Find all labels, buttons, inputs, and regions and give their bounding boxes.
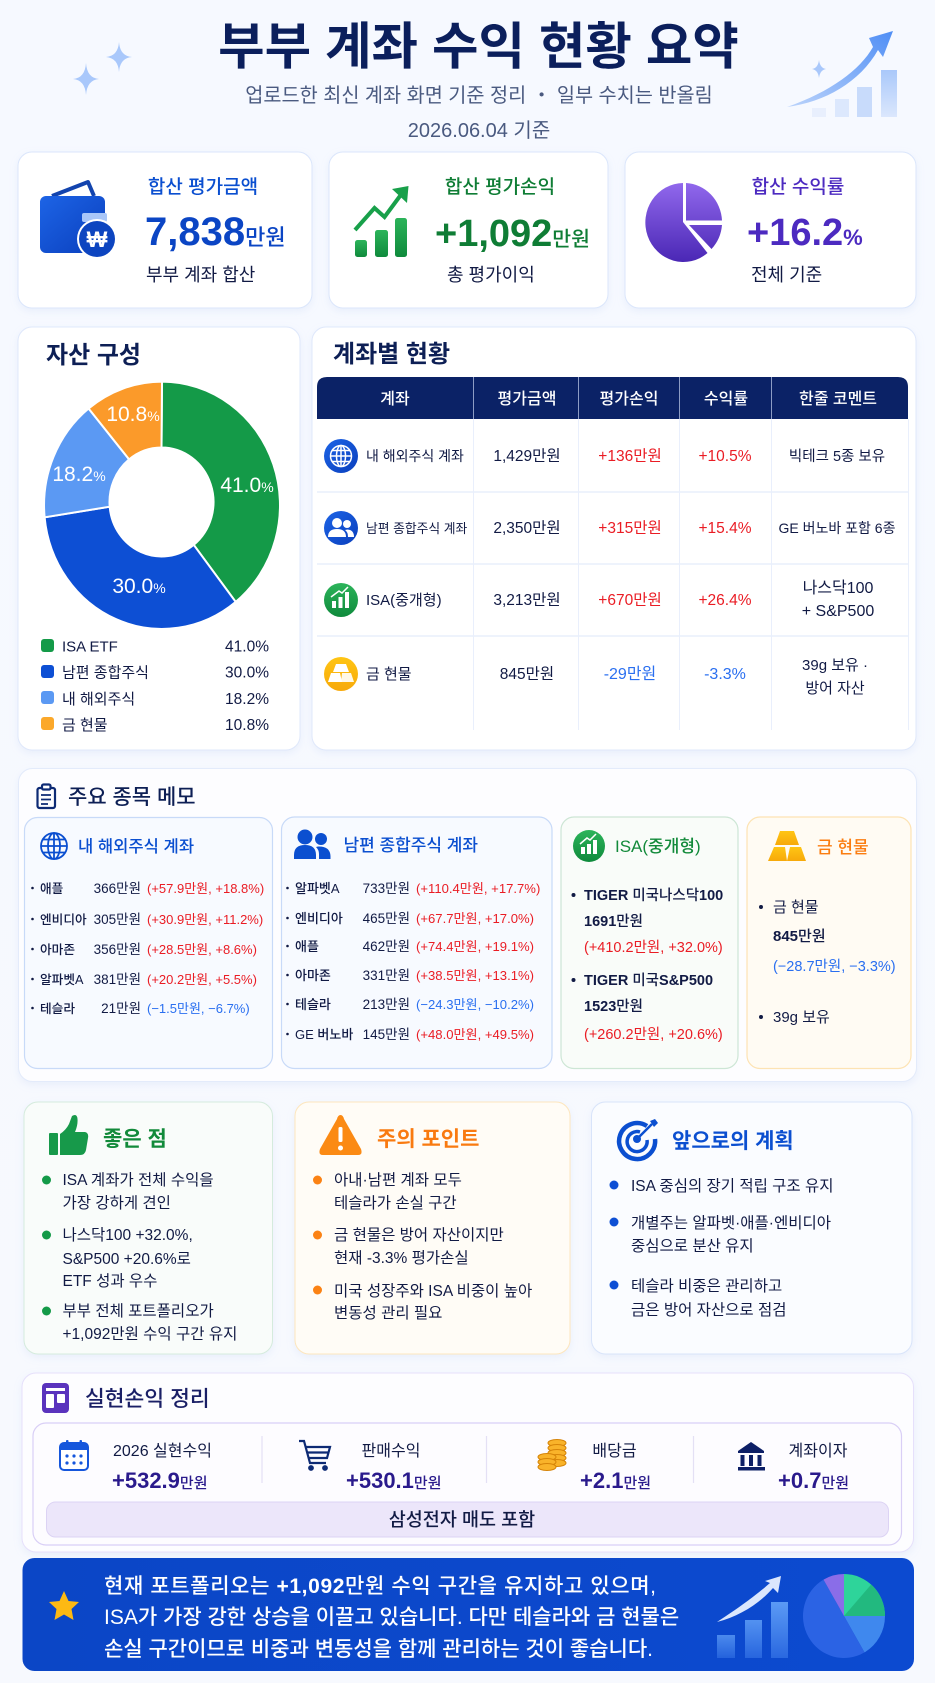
holdings list: 366만원 [94, 881, 141, 896]
panel: key holdings memo [18, 768, 916, 1082]
summary text [104, 1575, 679, 1661]
holdings list: 엔비디아 [40, 913, 87, 927]
row: ISA: +26.4% [698, 592, 752, 609]
icon: bars and arrow [717, 1576, 788, 1658]
icon: wallet [40, 182, 117, 259]
legend: 10.8% [225, 717, 269, 734]
holdings list: 엔비디아 [295, 911, 343, 926]
bullet list: 현재 -3.3% 평가손실 [334, 1249, 469, 1267]
value: +1,092만원 [435, 213, 590, 255]
holdings list: (+30.9만원, +11.2%) [147, 912, 263, 927]
bullet list: 테슬라가 손실 구간 [334, 1194, 457, 1212]
bullet list: ETF 성과 우수 [62, 1272, 157, 1290]
heading: 자산 구성 [46, 342, 141, 369]
icon: growth arrow with bars [787, 31, 897, 117]
donut labels: 30.0% [112, 575, 166, 598]
row: overseas stocks: 내 해외주식 계좌 [366, 448, 464, 464]
legend [41, 638, 269, 734]
bullet list: +1,092만원 수익 구간 유지 [62, 1325, 237, 1343]
stat: 2026 realized [60, 1440, 212, 1493]
holdings list: 애플 [40, 882, 64, 896]
holdings list: (−1.5만원, −6.7%) [147, 1001, 250, 1016]
holdings list [759, 899, 896, 1026]
holdings list [572, 887, 723, 1043]
row: ISA: 나스닥100 [803, 579, 874, 597]
icon: globe [41, 833, 67, 859]
holdings list: (+28.5만원, +8.6%) [147, 942, 257, 957]
value: 7,838만원 [145, 210, 286, 254]
heading: 주요 종목 메모 [68, 786, 196, 809]
row: husband stocks: 2,350만원 [493, 519, 561, 537]
legend: 41.0% [225, 638, 269, 656]
summary text: 손실 구간이므로 비중과 변동성을 함께 관리하는 것이 좋습니다. [104, 1638, 653, 1661]
icon: thumbs up [49, 1115, 88, 1155]
legend: 금 현물 [62, 717, 108, 734]
note: 부부 계좌 합산 [146, 265, 255, 285]
card: gold [747, 817, 911, 1068]
heading: 앞으로의 계획 [672, 1130, 794, 1153]
holdings list: (−24.3만원, −10.2%) [416, 997, 534, 1012]
card: husband stocks [282, 817, 552, 1068]
holdings list: 331만원 [363, 968, 410, 983]
row: husband stocks: GE 버노바 포함 6종 [779, 520, 896, 536]
note: 총 평가이익 [447, 265, 535, 285]
stat: interest: +0.7만원 [778, 1468, 849, 1493]
bullet list [313, 1171, 532, 1322]
title: 부부 계좌 수익 현황 요약 [218, 18, 739, 75]
icon: pie [803, 1574, 885, 1658]
icon: wallet: ₩ [87, 227, 108, 252]
stat: 2026 realized: 2026 실현수익 [113, 1442, 212, 1460]
holdings list: 845만원 [773, 928, 826, 945]
row: overseas stocks [324, 439, 885, 473]
donut chart [44, 382, 280, 629]
bullet list: ISA 중심의 장기 적립 구조 유지 [631, 1177, 834, 1195]
holdings list: (+110.4만원, +17.7%) [416, 881, 540, 896]
donut labels: 41.0% [220, 474, 274, 497]
icon: gold [324, 657, 358, 691]
panel: account table [312, 327, 916, 750]
bullet list: 가장 강하게 견인 [62, 1194, 171, 1212]
holdings list: 213만원 [363, 997, 410, 1012]
holdings list: 아마존 [295, 968, 331, 983]
bullet list: S&P500 +20.6%로 [62, 1251, 191, 1268]
row: gold: -3.3% [704, 666, 746, 683]
bullet list [42, 1171, 237, 1343]
label: 합산 수익률 [752, 176, 844, 198]
bullet list: 변동성 관리 필요 [334, 1304, 442, 1322]
holdings list: 733만원 [363, 881, 410, 896]
table header: 계좌 [380, 390, 410, 408]
row: overseas stocks: +136만원 [598, 447, 662, 465]
holdings list [286, 881, 540, 1042]
stat: dividend [538, 1440, 651, 1493]
label: 합산 평가손익 [445, 176, 555, 198]
row: husband stocks [324, 511, 896, 545]
row: ISA: 3,213만원 [493, 591, 561, 609]
icon: bank [738, 1442, 765, 1470]
holdings list: 애플 [295, 939, 319, 954]
icon: ISA chart [324, 583, 358, 617]
holdings list: TIGER 미국나스닥100 [584, 887, 723, 904]
banner: summary [22, 1558, 914, 1671]
heading: 실현손익 정리 [85, 1387, 210, 1411]
bullet list: 부부 전체 포트폴리오가 [62, 1302, 214, 1320]
icon: warning [319, 1115, 362, 1155]
heading: 계좌별 현황 [333, 341, 450, 368]
panel: asset allocation [18, 327, 300, 750]
holdings list: 테슬라 [295, 997, 331, 1012]
holdings list: (−28.7만원, −3.3%) [773, 958, 896, 975]
stat: sale profit: +530.1만원 [346, 1468, 442, 1493]
holdings list: 462만원 [363, 939, 410, 954]
donut labels: 18.2% [52, 463, 106, 486]
row: husband stocks: +15.4% [698, 520, 752, 537]
panel: future plan [592, 1102, 912, 1354]
row: ISA: +670만원 [598, 591, 662, 609]
holdings list: (+20.2만원, +5.5%) [147, 972, 257, 987]
legend: ISA ETF [62, 638, 118, 656]
holdings list: 1523만원 [584, 998, 643, 1015]
legend: 남편 종합주식 [62, 664, 149, 682]
card title: 남편 종합주식 계좌 [344, 836, 478, 855]
stat: dividend: 배당금 [592, 1442, 637, 1460]
row: ISA: + S&P500 [802, 603, 874, 620]
holdings list: (+38.5만원, +13.1%) [416, 968, 534, 983]
holdings list: (+260.2만원, +20.6%) [584, 1026, 723, 1043]
card title: 금 현물 [817, 838, 869, 857]
legend: 18.2% [225, 691, 269, 708]
stat: interest: 계좌이자 [789, 1442, 848, 1460]
table header: 평가금액 [498, 390, 556, 408]
row: gold: 방어 자산 [805, 680, 865, 697]
table header: 수익률 [704, 390, 748, 408]
heading: 주의 포인트 [377, 1128, 479, 1151]
icon: gold bars [768, 831, 806, 861]
panel: good points [24, 1102, 272, 1354]
legend: 내 해외주식 [62, 691, 135, 708]
holdings list: GE 버노바 [295, 1027, 353, 1042]
holdings list [31, 881, 264, 1016]
icon: people [294, 830, 330, 859]
card: ISA [561, 817, 738, 1068]
holdings list: 465만원 [363, 911, 410, 926]
icon: people [324, 511, 358, 545]
holdings list: 테슬라 [40, 1002, 75, 1016]
stat: 2026 realized: +532.9만원 [112, 1468, 208, 1493]
icon: calendar [60, 1440, 88, 1470]
stat: sale profit: 판매수익 [362, 1442, 420, 1460]
icon: star [49, 1591, 79, 1620]
bullet list [610, 1177, 834, 1319]
icon: chart up [355, 186, 408, 257]
bullet list: 금 현물은 방어 자산이지만 [334, 1226, 504, 1244]
date: 2026.06.04 기준 [408, 119, 550, 142]
card title: 내 해외주식 계좌 [78, 837, 194, 856]
row: husband stocks: 남편 종합주식 계좌 [366, 521, 468, 536]
holdings list: 305만원 [94, 912, 141, 927]
bullet list: 아내·남편 계좌 모두 [334, 1171, 462, 1189]
row: gold [324, 657, 868, 697]
icon: ISA chart [573, 830, 605, 862]
donut labels [52, 403, 274, 598]
note: 전체 기준 [751, 265, 822, 285]
holdings list: 금 현물 [773, 899, 819, 916]
holdings list: 145만원 [363, 1027, 410, 1042]
holdings list: 아마존 [40, 943, 75, 957]
icon: pie [645, 183, 722, 262]
row: gold: 금 현물 [366, 666, 412, 683]
holdings list: 알파벳A [295, 881, 340, 896]
holdings list: (+48.0만원, +49.5%) [416, 1027, 534, 1042]
row: overseas stocks: 빅테크 5종 보유 [789, 448, 885, 465]
holdings list: TIGER 미국S&P500 [584, 972, 713, 989]
holdings list: (+67.7만원, +17.0%) [416, 911, 534, 926]
table header: 평가손익 [600, 390, 658, 408]
icon: globe [324, 439, 358, 473]
icon: sparkles [73, 42, 132, 95]
legend: 30.0% [225, 664, 269, 682]
row: ISA [324, 579, 874, 620]
holdings list: (+74.4만원, +19.1%) [416, 939, 534, 954]
card title: ISA(중개형) [615, 837, 701, 856]
icon: clipboard [38, 784, 55, 808]
row: ISA: ISA(중개형) [366, 592, 442, 609]
holdings list: 1691만원 [584, 913, 643, 930]
panel: total return [625, 152, 916, 308]
row: gold: 845만원 [500, 665, 554, 683]
panel: caution points [295, 1102, 570, 1354]
note pill [46, 1502, 888, 1537]
card: overseas stocks [24, 818, 272, 1068]
bullet list: 중심으로 분산 유지 [631, 1237, 754, 1255]
bullet list: 미국 성장주와 ISA 비중이 높아 [334, 1282, 532, 1300]
table header: 한줄 코멘트 [799, 390, 877, 408]
bullet list: 테슬라 비중은 관리하고 [631, 1277, 782, 1295]
holdings list: 356만원 [94, 942, 141, 957]
row: overseas stocks: +10.5% [698, 448, 752, 465]
holdings list: 381만원 [94, 972, 141, 987]
donut labels: 10.8% [106, 403, 160, 426]
panel: realized profit [22, 1373, 914, 1552]
holdings list: 알파벳A [40, 973, 84, 987]
icon: cart [299, 1441, 330, 1470]
stat: dividend: +2.1만원 [580, 1468, 651, 1493]
holdings list: (+410.2만원, +32.0%) [584, 939, 723, 956]
holdings list: 21만원 [101, 1001, 141, 1016]
table header [317, 377, 908, 419]
holdings list: (+57.9만원, +18.8%) [147, 881, 264, 896]
bullet list: 나스닥100 +32.0%, [62, 1226, 193, 1244]
label: 합산 평가금액 [148, 176, 258, 198]
bullet list: 개별주는 알파벳·애플·엔비디아 [631, 1214, 831, 1232]
heading: 좋은 점 [103, 1128, 167, 1151]
value: +16.2% [747, 212, 863, 254]
row: gold: -29만원 [604, 665, 656, 683]
stat: sale profit [299, 1441, 442, 1493]
stat: interest [738, 1442, 849, 1493]
subtitle: 업로드한 최신 계좌 화면 기준 정리 ・ 일부 수치는 반올림 [245, 85, 713, 107]
note pill: 삼성전자 매도 포함 [389, 1509, 535, 1530]
icon: target [619, 1119, 658, 1159]
panel: total profit [329, 152, 608, 308]
summary text: ISA가 가장 강한 상승을 이끌고 있습니다. 다만 테슬라와 금 현물은 [104, 1606, 679, 1629]
bullet list: 금은 방어 자산으로 점검 [631, 1301, 787, 1319]
panel: total value [18, 152, 312, 308]
row: overseas stocks: 1,429만원 [493, 447, 561, 465]
row: husband stocks: +315만원 [598, 519, 662, 537]
holdings list: 39g 보유 [773, 1009, 830, 1026]
icon: calculator [42, 1383, 69, 1413]
bullet list: ISA 계좌가 전체 수익을 [62, 1171, 214, 1189]
icon: coins [538, 1440, 566, 1470]
summary text: 현재 포트폴리오는 +1,092만원 수익 구간을 유지하고 있으며, [104, 1575, 656, 1598]
row: gold: 39g 보유 · [802, 657, 868, 674]
